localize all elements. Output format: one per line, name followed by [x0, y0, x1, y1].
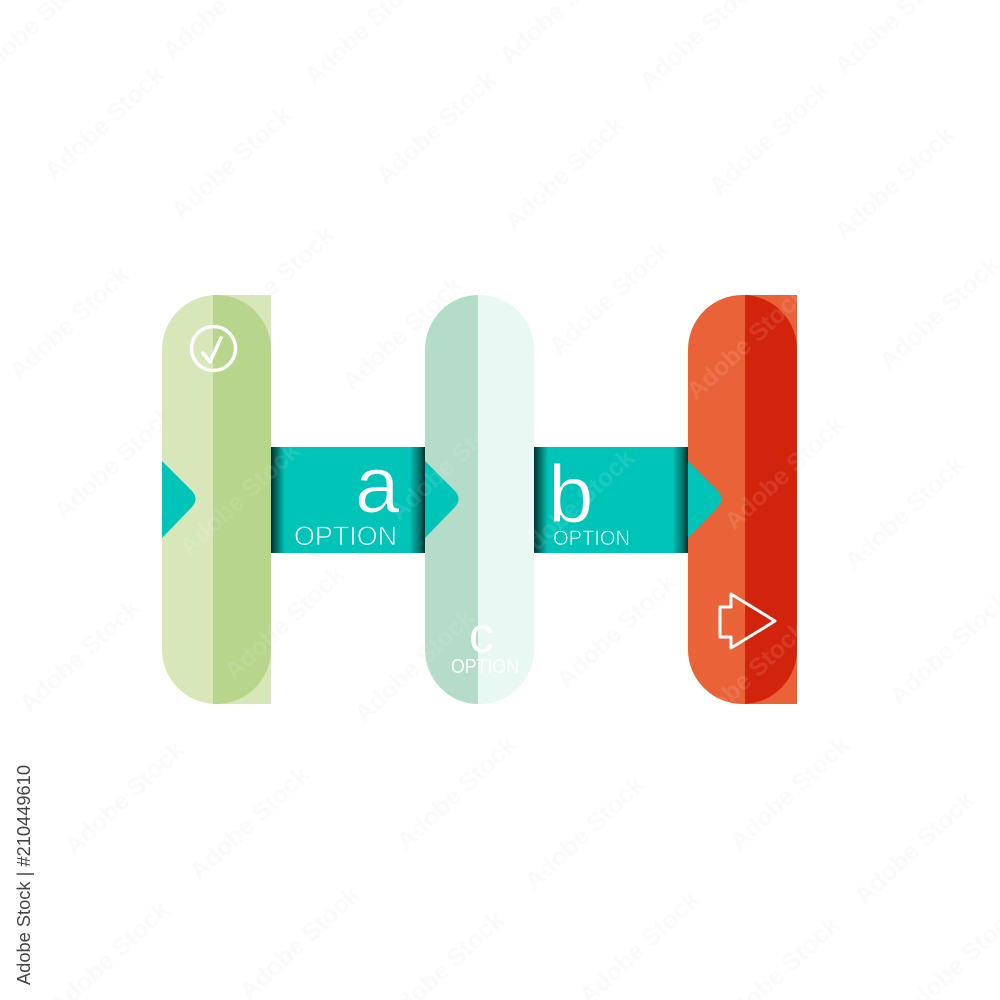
- panel: connector a: [271, 440, 425, 553]
- watermark pattern: Adobe Stock: [704, 76, 835, 200]
- watermark pattern: Adobe Stock: [519, 771, 650, 895]
- watermark over columns: Adobe Stock: [681, 281, 812, 405]
- icon: check mark: [192, 326, 236, 370]
- watermark over columns: [174, 271, 850, 740]
- watermark over columns: Adobe Stock: [337, 271, 468, 395]
- label: option b: OPTION: [553, 527, 630, 550]
- watermark over columns: Adobe Stock: [174, 437, 305, 561]
- watermark over columns: Adobe Stock: [349, 604, 480, 728]
- panel: mint column: [425, 295, 534, 704]
- watermark pattern: Adobe Stock: [337, 271, 468, 395]
- vertical stock credit: Adobe Stock | #210449610: [14, 765, 34, 985]
- watermark pattern: Adobe Stock: [14, 594, 145, 718]
- watermark pattern: Adobe Stock: [184, 761, 315, 885]
- watermark pattern: Adobe Stock: [499, 111, 630, 235]
- arrow: teal tab: [162, 461, 196, 538]
- watermark over columns: Adobe Stock: [509, 444, 640, 568]
- panel: connector b: [534, 447, 688, 553]
- watermark pattern: Adobe Stock: [209, 221, 340, 345]
- watermark pattern: Adobe Stock: [219, 561, 350, 685]
- watermark pattern: Adobe Stock: [391, 731, 522, 855]
- icon: outlined arrow: [720, 594, 775, 648]
- panel: green column: [162, 295, 271, 704]
- watermark pattern: Adobe Stock: [4, 261, 135, 385]
- watermark over columns: Adobe Stock: [681, 616, 812, 740]
- letter b: b: [548, 449, 594, 540]
- arrow: teal tab: [688, 461, 722, 538]
- label: option c: OPTION: [451, 656, 519, 678]
- watermark over columns: Adobe Stock: [219, 561, 350, 685]
- watermark pattern: Adobe Stock: [724, 731, 855, 855]
- watermark pattern: Adobe Stock: [349, 604, 480, 728]
- panel: red column: [688, 295, 797, 704]
- watermark pattern: Adobe Stock: [544, 236, 675, 360]
- watermark pattern: Adobe Stock: [849, 786, 980, 910]
- letter c: c: [469, 607, 494, 663]
- watermark pattern: Adobe Stock: [59, 736, 190, 860]
- watermark pattern: Adobe Stock: [166, 101, 297, 225]
- watermark pattern: Adobe Stock: [49, 401, 180, 525]
- arrow: teal tab: [425, 461, 458, 538]
- watermark pattern: Adobe Stock: [719, 411, 850, 535]
- watermark over columns: Adobe Stock: [384, 402, 515, 526]
- watermark pattern: Adobe Stock: [551, 569, 682, 693]
- watermark pattern: Adobe Stock: [829, 121, 960, 245]
- watermark pattern: Adobe Stock: [371, 66, 502, 190]
- watermark pattern: Adobe Stock: [39, 61, 170, 185]
- watermark over columns: Adobe Stock: [719, 411, 850, 535]
- letter a: a: [355, 440, 400, 529]
- watermark pattern: Adobe Stock: [839, 451, 970, 575]
- label: option a: OPTION: [294, 521, 397, 551]
